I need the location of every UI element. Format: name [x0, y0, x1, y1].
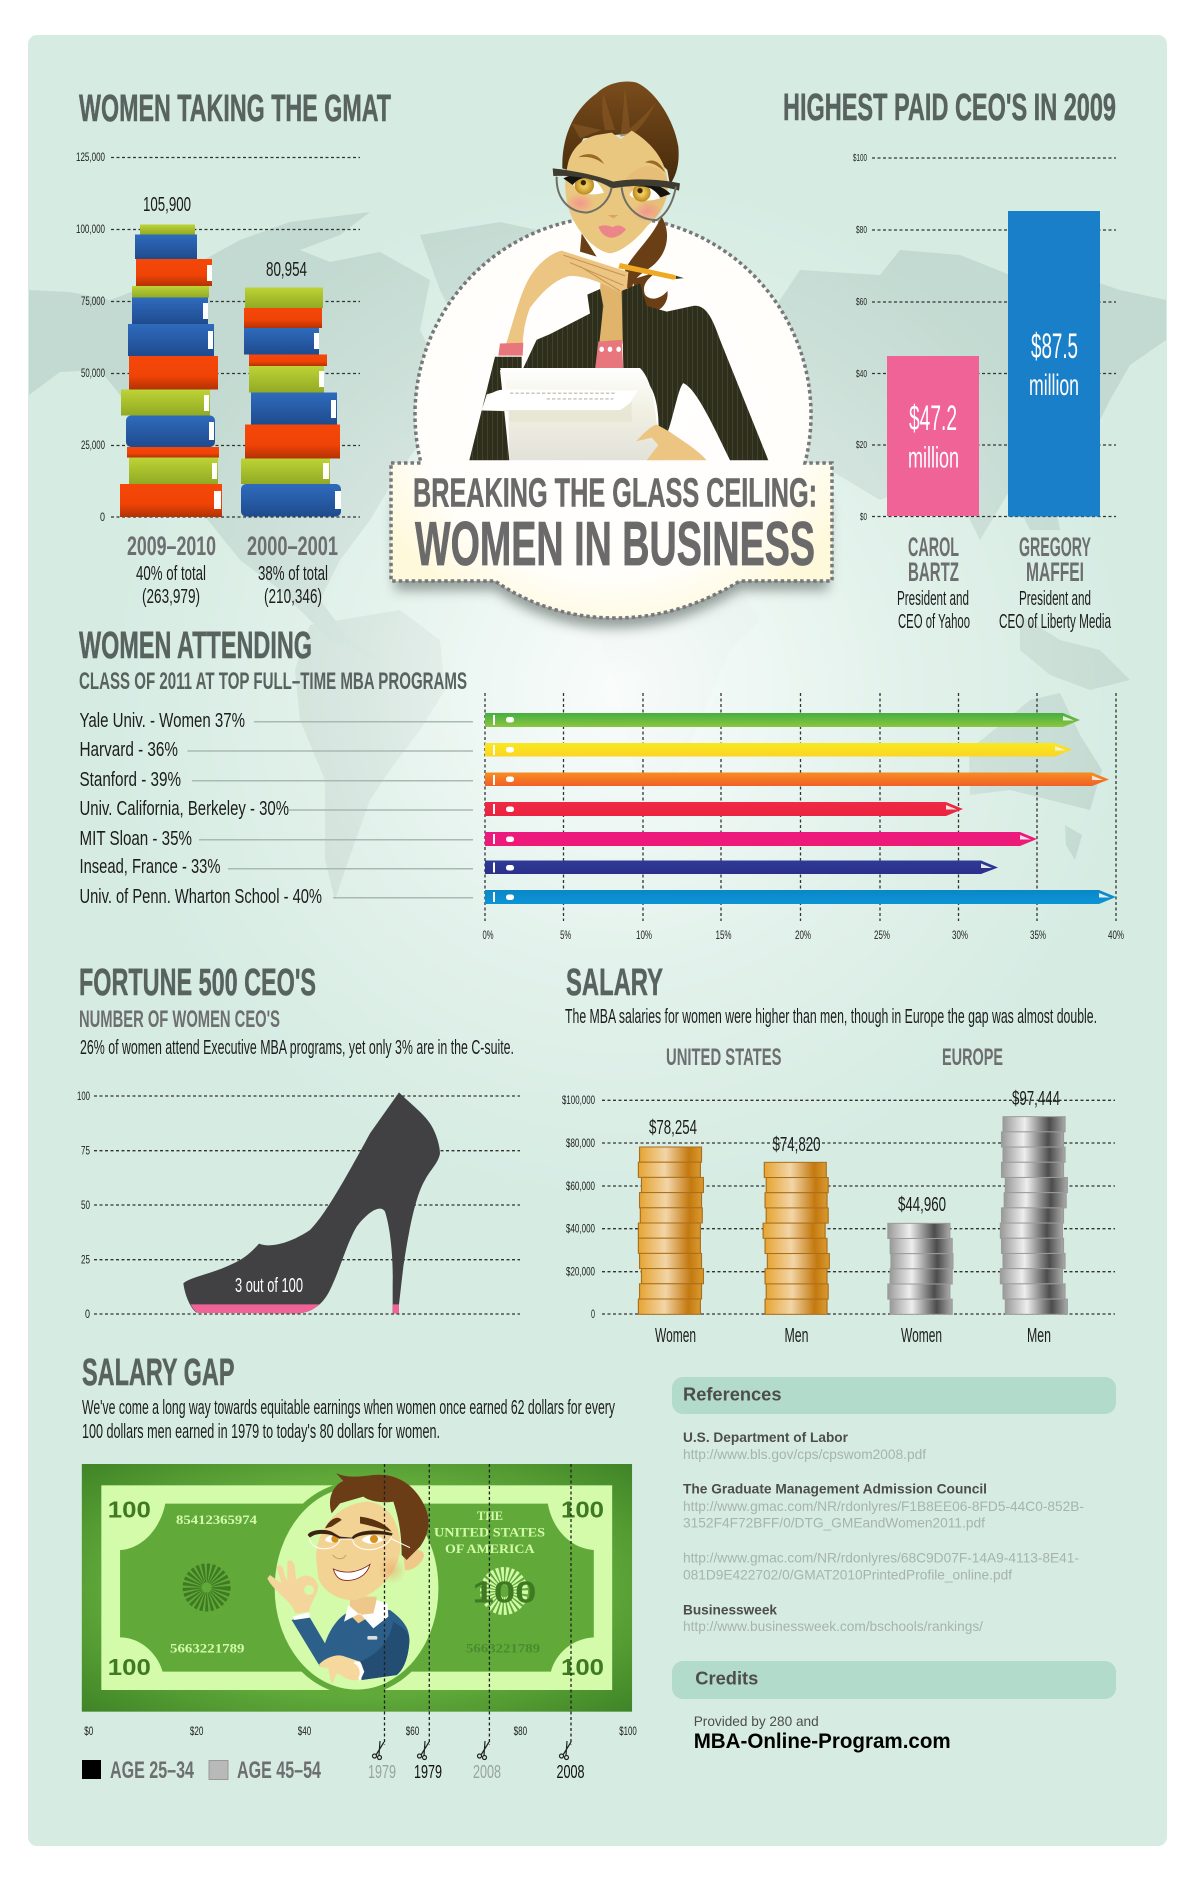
axis grid: $0 [860, 512, 867, 523]
description [82, 1397, 615, 1443]
caption: Gregory Maffei: MAFFEI [1026, 557, 1084, 587]
row: Berkeley [80, 798, 963, 820]
hair [330, 1473, 429, 1560]
cuff [498, 343, 523, 356]
axis grid [77, 1089, 520, 1321]
bill corner numerals [108, 1497, 604, 1680]
row: Yale [80, 710, 1080, 732]
axis grid: 25 [81, 1253, 90, 1267]
title line 2: WOMEN IN BUSINESS [415, 510, 815, 579]
panel: women taking the GMAT: 80,954 [266, 259, 307, 281]
description: 26% of women attend Executive MBA programs, yet only 3% are in the C-suite. [80, 1037, 514, 1059]
caption: Gregory Maffei: CEO of Liberty Media [999, 611, 1112, 633]
axis grid: 50 [81, 1198, 90, 1212]
notepad [482, 368, 659, 460]
description: We've come a long way towards equitable earnings when women once earned 62 dollars for every [82, 1397, 615, 1419]
heading: SALARY [566, 962, 663, 1004]
axis grid: $60 [856, 297, 867, 308]
references header [672, 1377, 1116, 1414]
credits text [694, 1713, 951, 1753]
dollar bill [82, 1464, 632, 1712]
brows [578, 154, 665, 173]
panel: Fortune 500 CEOs [77, 962, 520, 1321]
credits text: MBA-Online-Program.com [694, 1730, 951, 1753]
face [316, 1502, 400, 1600]
year caption 2009-2010: 2009–2010 [127, 531, 216, 561]
bill corner numerals: 100 [108, 1497, 151, 1523]
stack: US men [763, 1162, 829, 1314]
year labels: 2008 [556, 1762, 584, 1782]
neck [597, 272, 628, 344]
neck [350, 1597, 377, 1623]
hair curl [632, 272, 668, 311]
panel: women taking the GMAT [76, 88, 391, 608]
dollar axis: $20 [190, 1724, 204, 1738]
year caption 2000-2001 [247, 531, 338, 608]
axis grid [562, 1093, 1115, 1321]
caption: Gregory Maffei: President and [1019, 588, 1091, 610]
jacket [469, 283, 768, 460]
bill serial numbers and text: 5663221789 [170, 1641, 245, 1656]
percent axis: 25% [874, 928, 890, 942]
coin values: $97,444 [1012, 1088, 1060, 1110]
caption: Carol Bartz: CEO of Yahoo [898, 611, 970, 633]
bar: Carol Bartz: $47.2 [909, 399, 957, 438]
illustration: man portrait [267, 1473, 429, 1685]
year labels: 1979 [414, 1762, 442, 1782]
badge: shadow [395, 500, 828, 628]
left sunburst [192, 1573, 221, 1602]
axis grid: $20,000 [566, 1265, 595, 1279]
row: MIT Sloan [80, 828, 1037, 850]
description: 100 dollars men earned in 1979 to today's 80 dollars for women. [82, 1421, 440, 1443]
row: Harvard [80, 739, 1072, 761]
dollar axis: $40 [298, 1724, 311, 1738]
eyes [325, 1535, 383, 1544]
stack: US women [638, 1147, 703, 1314]
pencil [618, 263, 682, 280]
dollar axis: $60 [406, 1724, 419, 1738]
coin category labels: Men [1027, 1325, 1051, 1347]
caption: Carol Bartz: President and [897, 588, 969, 610]
panel: salary: EUROPE [942, 1044, 1003, 1071]
chart axis grid: 25,000 [81, 438, 105, 452]
legend: AGE 45–54 [237, 1757, 321, 1784]
row: Yale: Yale Univ. - Women 37% [80, 710, 245, 732]
title block [413, 470, 817, 579]
panel: references [672, 1377, 1116, 1753]
badge [367, 1636, 377, 1640]
bar: Gregory Maffei [1008, 211, 1100, 516]
credits text: Provided by 280 and [694, 1713, 819, 1729]
heading: WOMEN ATTENDING [79, 625, 312, 667]
axis grid: $60,000 [566, 1179, 595, 1193]
stack: Europe women [888, 1223, 953, 1314]
subheading: NUMBER OF WOMEN CEO'S [79, 1006, 280, 1033]
heading: WOMEN TAKING THE GMAT [79, 88, 391, 130]
book stack 2009-2010 [120, 224, 222, 517]
year caption 2000-2001: (210,346) [264, 586, 322, 608]
face [565, 131, 668, 253]
coin values [649, 1088, 1060, 1216]
chart axis grid [76, 150, 360, 524]
bill serial numbers and text: 85412365974 [176, 1512, 258, 1527]
glasses [308, 1530, 393, 1539]
year labels: 2008 [473, 1762, 501, 1782]
caption: Carol Bartz: CAROL [908, 532, 959, 562]
reference list: The Graduate Management Admission Council [683, 1481, 987, 1497]
bill corner numerals: 100 [561, 1654, 604, 1680]
references header: References [683, 1385, 782, 1405]
book stack 2000-2001 [241, 288, 341, 516]
row: MIT Sloan: MIT Sloan - 35% [80, 828, 192, 850]
chart axis grid: 75,000 [81, 294, 105, 308]
year caption 2009-2010: (263,979) [142, 586, 200, 608]
row: Wharton [80, 886, 1116, 908]
axis grid: 75 [81, 1144, 90, 1158]
year labels [368, 1762, 584, 1782]
title line 1: BREAKING THE GLASS CEILING: [413, 470, 817, 516]
reference list: 081D9E422702/0/GMAT2010PrintedProfile_online.pdf [683, 1566, 1012, 1582]
caption: Gregory Maffei: GREGORY [1019, 532, 1091, 562]
bill serial numbers and text [170, 1508, 545, 1656]
percent axis [482, 928, 1124, 942]
nose [333, 1555, 346, 1559]
axis grid: $20 [856, 440, 867, 451]
mouth [598, 225, 626, 238]
reference list: http://www.businessweek.com/bschools/rankings/ [683, 1618, 983, 1634]
axis grid: $80,000 [566, 1136, 595, 1150]
axis grid: $40 [856, 369, 867, 380]
caption: Carol Bartz: BARTZ [908, 557, 959, 587]
caption: Carol Bartz [897, 532, 970, 633]
bill serial numbers and text: UNITED STATES [434, 1525, 545, 1540]
bill corner numerals: 100 [472, 1575, 536, 1610]
legend: AGE 25–34 [110, 1757, 194, 1784]
dollar axis: $100 [619, 1724, 637, 1738]
bill serial numbers and text: THE [477, 1508, 503, 1523]
lower hand [319, 1655, 363, 1685]
row: Berkeley: Univ. California, Berkeley - 30% [80, 798, 289, 820]
row: Stanford [80, 769, 1109, 791]
bill corner numerals: 100 [108, 1654, 151, 1680]
percent axis: 35% [1030, 928, 1046, 942]
body [469, 251, 768, 460]
panel: women attending [79, 625, 1124, 942]
bar: Gregory Maffei: $87.5 [1031, 327, 1078, 366]
axis grid: $100 [853, 153, 867, 164]
coin category labels: Women [655, 1325, 696, 1347]
dollar axis [84, 1724, 637, 1738]
axis grid: 0 [85, 1307, 90, 1321]
connector lines [188, 722, 473, 898]
left arm [506, 251, 628, 344]
cheeks [565, 193, 595, 214]
bar: Carol Bartz: million [908, 442, 959, 474]
eyes [573, 175, 660, 201]
panel: salary [562, 962, 1115, 1347]
vertical grid [485, 693, 1116, 921]
icon: high heel shoe [183, 1092, 440, 1313]
coin category labels: Men [784, 1325, 808, 1347]
subheading: CLASS OF 2011 AT TOP FULL–TIME MBA PROGRAMS [79, 668, 467, 695]
coin category labels: Women [901, 1325, 942, 1347]
hair [562, 82, 679, 185]
badge: circle and banner [391, 217, 832, 618]
bill shapes [82, 1464, 632, 1712]
axis grid: 0 [591, 1307, 595, 1321]
world map background [29, 212, 1166, 900]
bar: Gregory Maffei: million [1029, 369, 1079, 402]
percent axis: 15% [716, 928, 732, 942]
coin stacks [638, 1117, 1067, 1314]
reference list: 3152F4F72BFF/0/DTG_GMEandWomen2011.pdf [683, 1515, 985, 1531]
brows [325, 1517, 392, 1532]
reference list: http://www.bls.gov/cps/cpswom2008.pdf [683, 1446, 926, 1462]
sweater [292, 1610, 409, 1680]
bill serial numbers and text: 5663221789 [466, 1641, 541, 1656]
reference list: http://www.gmac.com/NR/rdonlyres/68C9D07F-14A9-4113-8E41- [683, 1549, 1079, 1565]
shoe label: 3 out of 100 [235, 1275, 303, 1297]
icon: scissors [372, 1741, 571, 1760]
smile [333, 1564, 370, 1580]
percent axis: 30% [952, 928, 968, 942]
row: Stanford: Stanford - 39% [80, 769, 181, 791]
row: Insead [80, 856, 998, 878]
axis grid [853, 153, 1116, 523]
heading: SALARY GAP [82, 1352, 234, 1394]
coin values: $44,960 [898, 1194, 946, 1216]
axis grid: 100 [77, 1089, 90, 1103]
percent axis: 10% [636, 928, 652, 942]
blouse [595, 340, 623, 370]
heading: FORTUNE 500 CEO'S [79, 962, 316, 1004]
axis grid: $80 [856, 225, 867, 236]
chart axis grid: 0 [100, 510, 105, 524]
coin category labels [655, 1325, 1051, 1347]
axis grid: $40,000 [566, 1222, 595, 1236]
year caption 2009-2010 [127, 531, 216, 608]
coin values: $78,254 [649, 1117, 697, 1139]
chart axis grid: 100,000 [76, 222, 105, 236]
value labels: 105,900 [143, 194, 191, 216]
head [553, 82, 680, 253]
dollar axis: $80 [514, 1724, 527, 1738]
dollar axis: $0 [84, 1724, 93, 1738]
bar: Carol Bartz [887, 356, 979, 516]
bill corner numerals: 100 [561, 1497, 604, 1523]
caption: Gregory Maffei [999, 532, 1112, 633]
cuff [292, 1612, 310, 1620]
year guide lines [384, 1464, 571, 1745]
coin values: $74,820 [772, 1134, 820, 1156]
chart axis grid: 125,000 [76, 150, 105, 164]
reference list: Businessweek [683, 1601, 777, 1617]
row: Harvard: Harvard - 36% [80, 739, 178, 761]
percent axis: 5% [560, 928, 571, 942]
reference list [683, 1429, 1084, 1634]
collar [344, 1600, 388, 1628]
percent axis: 0% [482, 928, 494, 942]
panel: salary gap [82, 1352, 637, 1784]
ponytail and neck [580, 217, 667, 292]
year caption 2000-2001: 2000–2001 [247, 531, 338, 561]
percent axis: 20% [795, 928, 811, 942]
reference list: U.S. Department of Labor [683, 1429, 849, 1445]
percent axis: 40% [1108, 928, 1124, 942]
year caption 2000-2001: 38% of total [258, 563, 328, 585]
axis grid: $100,000 [562, 1093, 595, 1107]
credits header [672, 1661, 1116, 1699]
illustration: businesswoman [469, 82, 768, 460]
bill serial numbers and text: OF AMERICA [445, 1541, 535, 1556]
year caption 2009-2010: 40% of total [136, 563, 206, 585]
ear [403, 1550, 424, 1570]
right hand [636, 424, 707, 460]
row: Insead: Insead, France - 33% [80, 856, 221, 878]
stack: Europe men [1000, 1117, 1067, 1314]
year labels: 1979 [368, 1762, 396, 1782]
reference list: http://www.gmac.com/NR/rdonlyres/F1B8EE06-8FD5-44C0-852B- [683, 1498, 1084, 1514]
legend [82, 1757, 321, 1784]
credits header: Credits [695, 1669, 758, 1689]
nose [608, 215, 618, 218]
region labels: UNITED STATES [666, 1044, 782, 1071]
glasses [553, 168, 680, 191]
OK hand [267, 1560, 318, 1613]
row: Wharton: Univ. of Penn. Wharton School - 40% [80, 886, 322, 908]
panel: highest paid CEOs [783, 87, 1116, 633]
right sunburst [489, 1576, 519, 1606]
chart axis grid: 50,000 [81, 366, 105, 380]
